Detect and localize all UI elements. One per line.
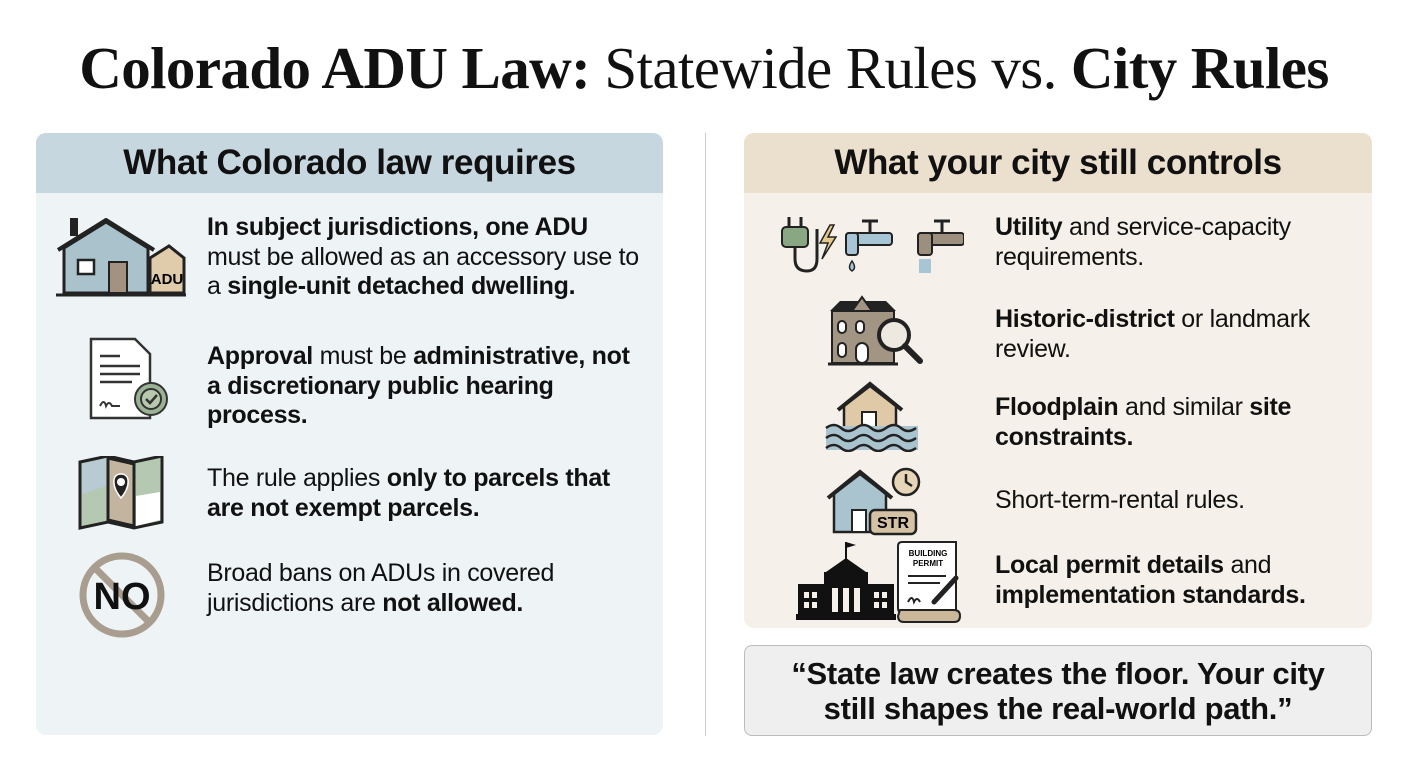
text: utility (995, 213, 1291, 270)
text: broad bans: Broad bans on ADUs in covered (207, 559, 554, 587)
icon: utilities (781, 217, 964, 273)
heading: left panel (36, 133, 663, 193)
text: local permit details: Local permit details and (995, 551, 1271, 579)
icon: city hall and building permit: PERMIT (913, 559, 943, 568)
text: non-exempt parcels: The rule applies only to parcels that (207, 464, 610, 492)
text: historic district (995, 305, 1310, 362)
text: one ADU allowed: a single-unit detached dwelling. (207, 272, 575, 300)
text: one ADU allowed (207, 213, 639, 300)
text: administrative approval: a discretionary public hearing (207, 372, 554, 400)
icon: NO symbol (80, 552, 164, 638)
text: broad bans: jurisdictions are not allowed. (207, 588, 523, 616)
text: local permit details (995, 551, 1306, 608)
text: non-exempt parcels: are not exempt parcels. (207, 494, 479, 522)
icon: document with seal (90, 338, 168, 420)
heading: left panel: What Colorado law requires (123, 143, 576, 182)
text: administrative approval (207, 342, 630, 429)
title: Colorado ADU Law: Statewide Rules vs. City Rules (79, 35, 1329, 101)
callout: quote: still shapes the real-world path.” (824, 690, 1292, 726)
text: local permit details: implementation standards. (995, 580, 1306, 608)
icon: short-term rental (826, 468, 920, 536)
icon: short-term rental: STR (877, 515, 909, 532)
icon: city hall and building permit (796, 541, 961, 623)
panel: what your city still controls (744, 133, 1372, 628)
icon: house with ADU: ADU (151, 271, 183, 288)
text: utility: Utility and service-capacity (995, 213, 1291, 241)
text: short-term rental: Short-term-rental rules. (995, 486, 1245, 514)
text: administrative approval: Approval must be administrative, not (207, 342, 630, 370)
icon: city hall and building permit: BUILDING (909, 549, 947, 558)
text: non-exempt parcels (207, 464, 610, 522)
callout: quote: “State law creates the floor. Your city (791, 656, 1325, 690)
panel: what Colorado law requires (36, 133, 663, 735)
text: broad bans (206, 559, 554, 616)
icon: NO symbol: NO (94, 576, 150, 618)
icon: flooded house (825, 382, 918, 452)
text: administrative approval: process. (207, 401, 307, 429)
text: floodplain (995, 393, 1291, 450)
text: one ADU allowed: In subject jurisdictions, one ADU (207, 213, 588, 241)
text: floodplain: Floodplain and similar site (995, 393, 1291, 421)
text: historic district: review. (995, 334, 1071, 362)
heading: right panel (744, 133, 1372, 193)
heading: right panel: What your city still controls (834, 143, 1282, 182)
callout: quote (744, 645, 1372, 736)
text: floodplain: constraints. (995, 422, 1133, 450)
text: one ADU allowed: must be allowed as an accessory use to (207, 242, 639, 270)
text: utility: requirements. (995, 242, 1144, 270)
icon: map with pin (78, 456, 164, 530)
icon: house with ADU (56, 218, 186, 296)
icon: historic building with magnifier (828, 295, 923, 366)
text: historic district: Historic-district or landmark (995, 305, 1310, 333)
